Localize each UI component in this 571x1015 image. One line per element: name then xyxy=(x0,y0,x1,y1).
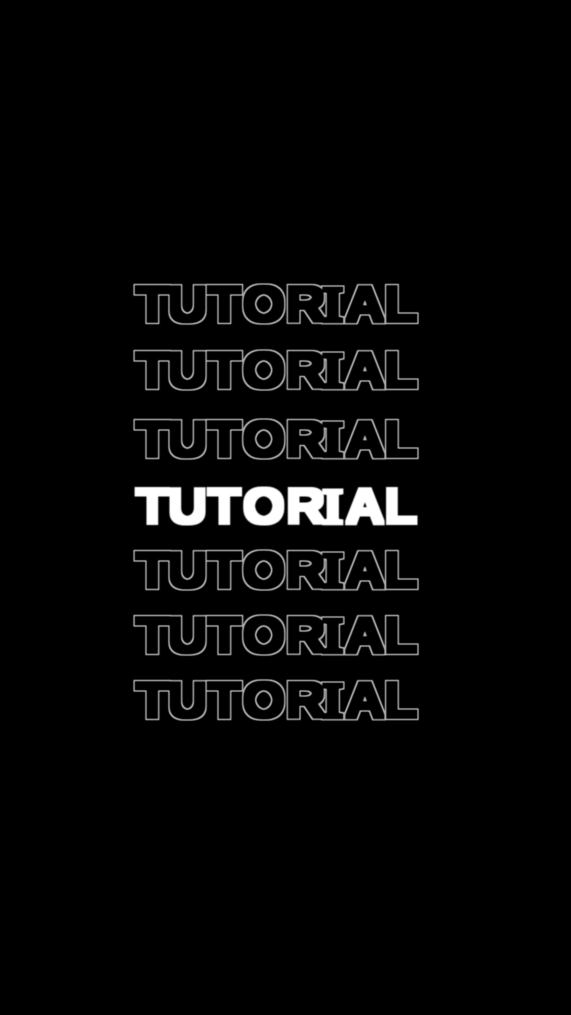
outlined word, row 3: AL xyxy=(346,411,417,467)
outlined word, row 6 xyxy=(136,607,417,664)
solid white highlighted word xyxy=(136,478,417,535)
solid white highlighted word: AL xyxy=(346,478,417,534)
outlined word, row 6: AL xyxy=(346,607,417,663)
outlined word, row 5: TUTOR xyxy=(136,542,325,598)
outlined word, row 1: I xyxy=(322,278,343,333)
outlined word, row 7: I xyxy=(322,674,343,729)
outlined word, row 1: AL xyxy=(346,276,417,332)
outlined word, row 2: AL xyxy=(346,342,417,398)
solid white highlighted word: TUTOR xyxy=(136,478,325,534)
outlined word, row 1: TUTOR xyxy=(136,276,325,332)
outlined word, row 2 xyxy=(136,342,417,399)
outlined word, row 1 xyxy=(136,276,417,333)
outlined word, row 5 xyxy=(136,542,417,599)
outlined word, row 7: TUTOR xyxy=(136,672,325,728)
solid white highlighted word: I xyxy=(322,480,343,535)
outlined word, row 2: TUTOR xyxy=(136,342,325,398)
outlined word, row 5: I xyxy=(322,544,343,599)
outlined word, row 3: TUTOR xyxy=(136,411,325,467)
outlined word, row 2: I xyxy=(322,344,343,399)
outlined word, row 5: AL xyxy=(346,542,417,598)
outlined word, row 7: AL xyxy=(346,672,417,728)
outlined word, row 7 xyxy=(136,672,417,729)
outlined word, row 6: I xyxy=(322,609,343,664)
outlined word, row 6: TUTOR xyxy=(136,607,325,663)
outlined word, row 3: I xyxy=(322,413,343,468)
outlined word, row 3 xyxy=(136,411,417,468)
